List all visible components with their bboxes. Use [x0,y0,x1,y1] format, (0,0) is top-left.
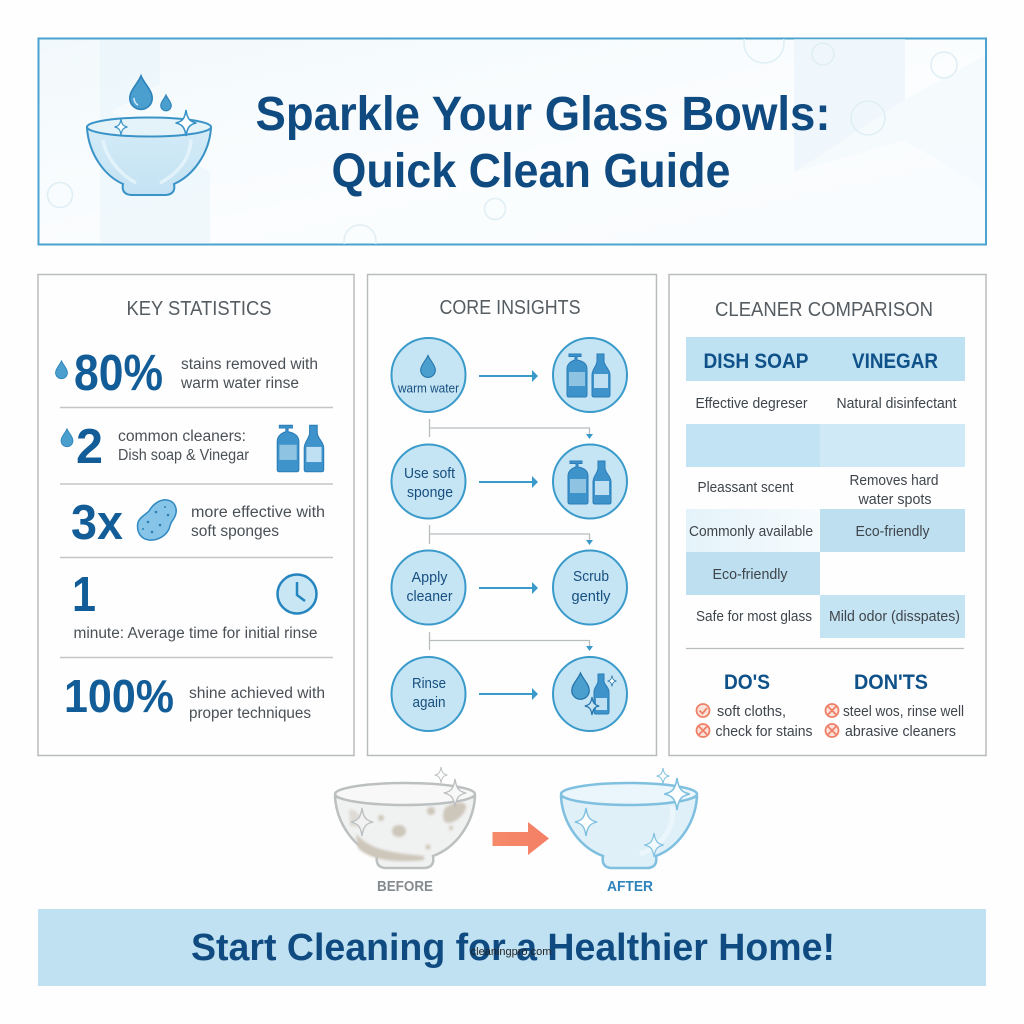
stat: 1 minute: minute: Average time for initial rinse [74,625,318,642]
connectors [430,419,590,650]
stat: 80%: stains removed with [181,356,318,373]
call to action footer [38,909,986,986]
do's and don'ts: DO'S [724,671,770,694]
header banner [38,38,987,246]
stat: 80%: warm water rinse [180,375,299,392]
comparison table: VINEGAR [852,350,938,373]
comparison table: DISH SOAP [704,350,808,373]
comparison table: Eco-friendly [856,524,930,540]
stat: 2 cleaners: 2 [76,420,103,474]
call to action footer: Start Cleaning for a Healthier Home! [191,927,835,969]
stat: 80% [56,344,318,401]
title: Sparkle Your Glass Bowls: [256,88,830,141]
core insights heading: CORE INSIGHTS [440,297,580,319]
after bowl [561,768,697,895]
comparison table: Removes hard [850,473,938,489]
comparison table: Natural disinfectant [836,396,956,412]
title [256,88,830,198]
comparison table: Safe for most glass [696,609,812,625]
flow labels: Use soft [404,466,455,482]
arrow: before to after [492,822,549,855]
stat: 100% shine: 100% [64,670,174,722]
flow labels: cleaner [406,589,453,605]
stat: 100% shine [64,670,325,722]
flow labels: warm water [397,382,459,396]
do's and don'ts: soft cloths, [717,704,786,720]
comparison table: Effective degreser [696,396,808,412]
stat: 100% shine: shine achieved with [189,685,325,702]
stat: 3x sponges [71,496,325,550]
title: Quick Clean Guide [332,145,730,198]
flow labels [397,355,611,711]
panel: cleaner comparison [669,274,986,756]
comparison table: Eco-friendly [712,567,788,583]
do's and don'ts: steel wos, rinse well [843,704,964,720]
flow arrows [479,370,538,700]
cleaner comparison heading: CLEANER COMPARISON [715,299,933,321]
flow icons [567,354,616,715]
do's and don'ts [696,671,964,740]
before bowl [335,767,475,895]
before label: BEFORE [377,879,433,895]
flow labels: Apply [412,570,448,586]
stat: 3x sponges: 3x [71,496,123,550]
flow labels: sponge [407,485,453,501]
flow labels: gently [572,589,611,605]
comparison table: Pleassant scent [698,480,794,496]
flow circles [392,338,627,731]
flow labels: Scrub [573,569,609,585]
stat: 3x sponges: more effective with [191,504,325,521]
key statistics heading: KEY STATISTICS [126,298,272,320]
comparison table: water spots [858,492,932,508]
icon: bowl with drops [87,76,211,195]
panel: key statistics [38,274,354,756]
panel: core insights [368,274,656,756]
stat: 1 minute: 1 [72,568,96,622]
comparison table: Mild odor (disspates) [829,609,960,625]
stat: 100% shine: proper techniques [189,705,311,722]
flow labels: Rinse [412,676,446,692]
stat: 2 cleaners: Dish soap & Vinegar [118,447,249,464]
stat: 1 minute [72,568,318,642]
comparison table [686,337,965,638]
stat: 2 cleaners: common cleaners: [118,428,246,445]
comparison table: Commonly available [689,524,813,540]
do's and don'ts: DON'TS [854,671,928,694]
do's and don'ts: abrasive cleaners [845,724,956,740]
do's and don'ts: check for stains [716,724,812,740]
after label: AFTER [607,879,653,895]
stat: 2 cleaners [61,420,324,474]
flow labels: again [412,695,446,711]
stat: 80%: 80% [74,344,163,401]
stat: 3x sponges: soft sponges [191,523,279,540]
watermark: cleaningpro.com [471,946,551,958]
